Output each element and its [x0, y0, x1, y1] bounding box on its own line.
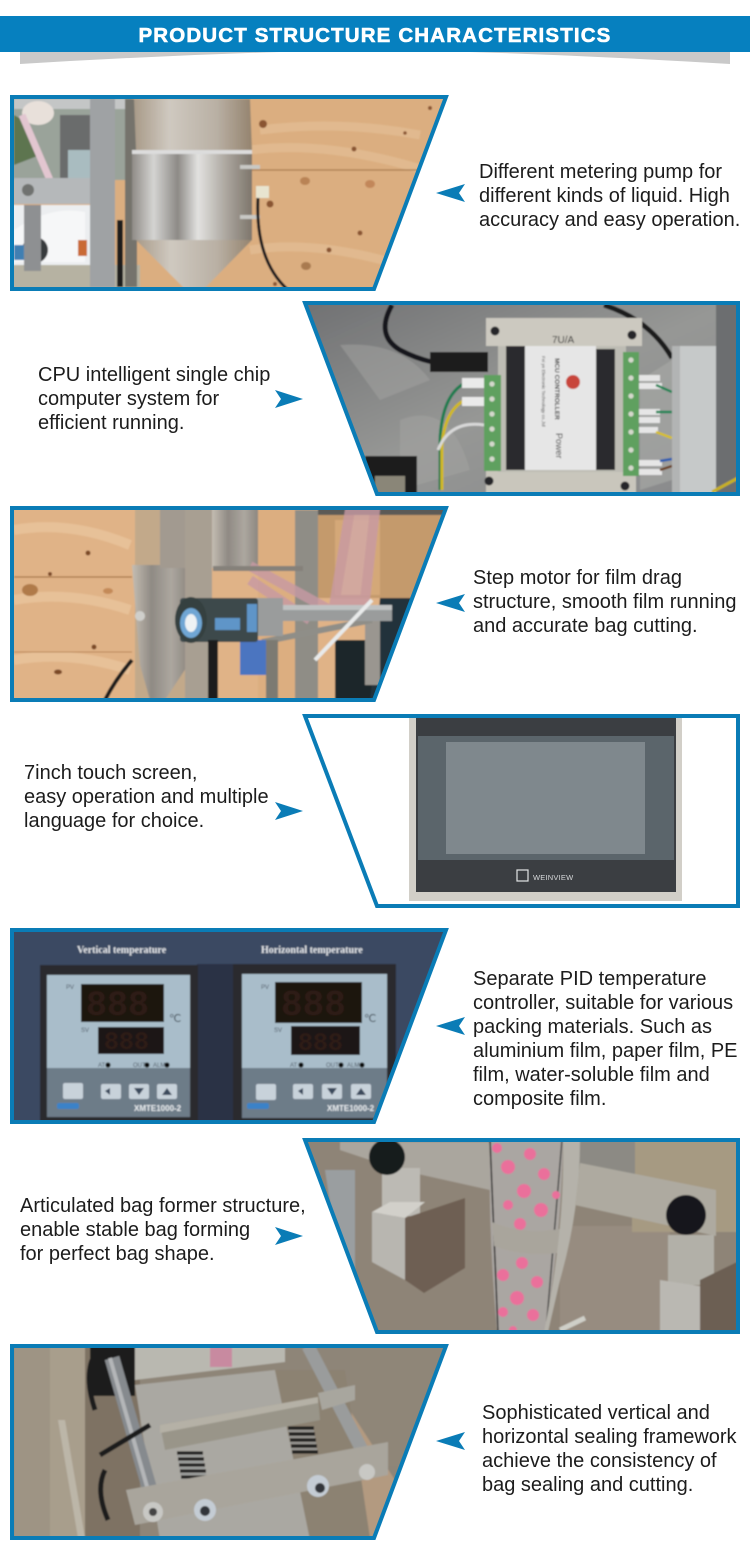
description: CPU intelligent single chip [38, 364, 270, 386]
photo: temperature controllers: XMTE1000-2 [134, 1104, 182, 1113]
panel: step motor [10, 505, 736, 703]
photo: controller board: Fei ye Electronic Technology co.,ltd [541, 356, 546, 427]
photo: temperature controllers: PV [261, 985, 269, 991]
arrow [436, 1017, 465, 1035]
photo: controller board: 7U/A [552, 335, 575, 346]
arrow [275, 390, 303, 408]
photo: temperature controllers: AT [98, 1063, 106, 1069]
description: and accurate bag cutting. [473, 615, 698, 637]
header banner [0, 16, 750, 64]
description: structure, smooth film running [473, 591, 736, 613]
title: PRODUCT STRUCTURE CHARACTERISTICS [138, 24, 612, 47]
photo: temperature controllers: ℃ [364, 1013, 376, 1025]
arrow [275, 1227, 303, 1245]
description: different kinds of liquid. High [479, 185, 730, 207]
photo: temperature controllers: Horizontal temperature [261, 945, 363, 956]
description: enable stable bag forming [20, 1219, 250, 1241]
photo: temperature controllers: SV [81, 1028, 89, 1034]
photo frame [305, 1140, 738, 1332]
panel: bag former [20, 1136, 740, 1334]
photo: bag former [300, 1136, 740, 1334]
description: film, water-soluble film and [473, 1064, 710, 1086]
photo: temperature controllers: ℃ [169, 1013, 181, 1025]
photo frame [12, 97, 446, 289]
photo: temperature controllers: SV [274, 1028, 282, 1034]
photo: film drag motor [10, 505, 450, 703]
photo: temperature controllers: OUT [326, 1063, 339, 1069]
photo frame [12, 1346, 446, 1538]
photo: temperature controllers: 888 [298, 1029, 343, 1058]
banner bar [0, 16, 750, 52]
arrow [436, 594, 465, 612]
description: Step motor for film drag [473, 567, 682, 589]
panel: PID temperature controller [10, 926, 738, 1125]
photo: controller board [300, 300, 740, 498]
photo: temperature controllers: AT [290, 1063, 298, 1069]
description: computer system for [38, 388, 220, 410]
photo: temperature controllers: 888 [281, 985, 346, 1026]
arrow [436, 184, 465, 202]
description: Different metering pump for [479, 161, 722, 183]
photo frame [12, 930, 446, 1122]
photo: temperature controllers: 888 [86, 986, 149, 1026]
description: 7inch touch screen, [24, 762, 197, 784]
description: aluminium film, paper film, PE [473, 1040, 738, 1062]
panel: touch screen [24, 716, 738, 906]
photo: sealing framework [10, 1342, 450, 1540]
description: accuracy and easy operation. [479, 209, 740, 231]
photo frame [12, 508, 446, 700]
banner shadow ribbon [20, 52, 730, 64]
description: achieve the consistency of [482, 1450, 717, 1472]
description: Articulated bag former structure, [20, 1195, 306, 1217]
photo: temperature controllers: ALM [153, 1063, 165, 1069]
description: language for choice. [24, 810, 204, 832]
description: Separate PID temperature [473, 968, 706, 990]
photo: controller board: Power [554, 433, 564, 459]
panel: metering pump [10, 95, 740, 291]
photo: temperature controllers: OUT [133, 1063, 146, 1069]
photo: temperature controllers: PV [66, 985, 74, 991]
description: composite film. [473, 1088, 606, 1110]
description: packing materials. Such as [473, 1016, 712, 1038]
photo: temperature controllers: 888 [104, 1028, 149, 1057]
arrow [436, 1432, 465, 1450]
photo frame [305, 716, 738, 906]
arrow [275, 802, 303, 820]
description: easy operation and multiple [24, 786, 269, 808]
photo: controller board: MCU CONTROLLER [553, 358, 560, 420]
photo: touch screen [409, 716, 682, 901]
panel: sealing framework [10, 1342, 738, 1540]
description: bag sealing and cutting. [482, 1474, 693, 1496]
photo: hopper against wood [10, 95, 450, 291]
photo: temperature controllers: XMTE1000-2 [327, 1104, 375, 1113]
photo: touch screen: WEINVIEW [533, 873, 574, 882]
photo frame [305, 303, 738, 494]
description: for perfect bag shape. [20, 1243, 215, 1265]
photo: temperature controllers: Vertical temperature [77, 945, 167, 956]
photo: temperature controllers: ALM [347, 1063, 359, 1069]
description: Sophisticated vertical and [482, 1402, 710, 1424]
photo: temperature controllers [10, 926, 450, 1125]
description: controller, suitable for various [473, 992, 733, 1014]
panel: CPU controller [38, 300, 740, 498]
description: horizontal sealing framework [482, 1426, 738, 1448]
description: efficient running. [38, 412, 184, 434]
